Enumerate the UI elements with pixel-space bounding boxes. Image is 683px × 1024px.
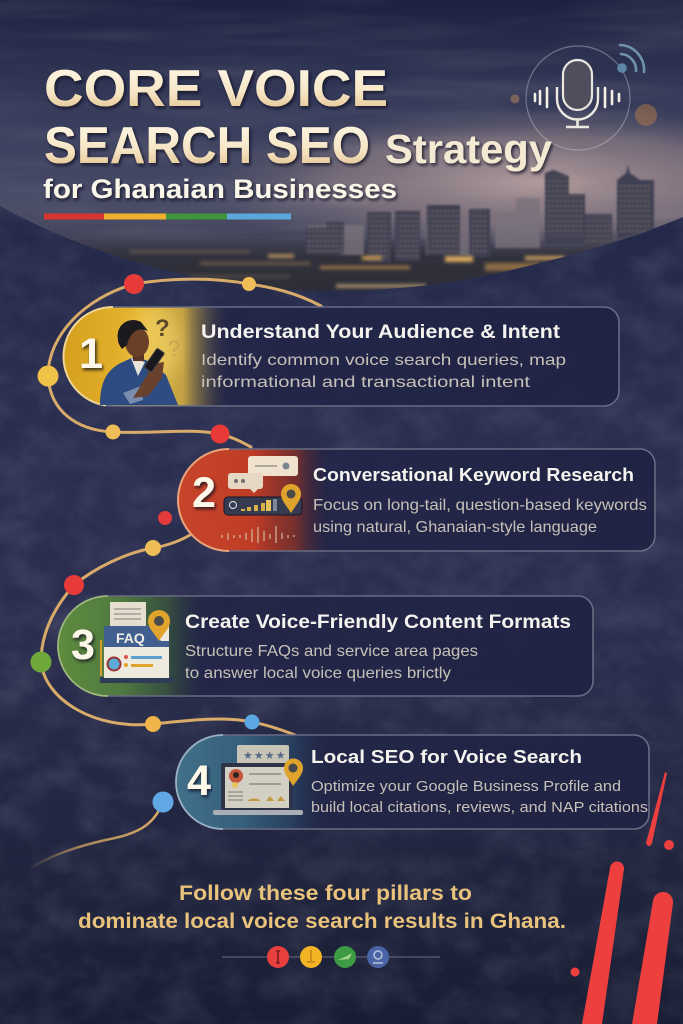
panel 1 description: Identify common voice search queries, map xyxy=(201,352,566,369)
microphone emblem xyxy=(510,45,657,150)
panel 4 heading: Local SEO for Voice Search xyxy=(311,747,582,767)
footer message xyxy=(78,882,566,933)
panel 1 description xyxy=(201,352,566,391)
panel 4 description xyxy=(311,778,648,816)
panel 2 description: using natural, Ghanaian-style language xyxy=(313,519,597,536)
icon: laptop with listing, stars and map pin xyxy=(213,745,303,815)
title xyxy=(43,60,552,204)
icon: chat bubbles, keyword bar and map pin xyxy=(222,456,302,543)
icon: FAQ document with map pin: FAQ xyxy=(116,630,145,646)
icon: person speaking into phone: ? xyxy=(168,336,180,361)
title: Strategy xyxy=(385,126,552,172)
number 3: 3 xyxy=(71,621,95,669)
header panorama: dusk sky and city skyline xyxy=(0,0,683,308)
decorative red streaks xyxy=(570,772,674,1024)
number 4: 4 xyxy=(187,757,211,805)
path nodes xyxy=(30,274,260,812)
panel 2 heading: Conversational Keyword Research xyxy=(313,465,634,485)
footer pillar icons xyxy=(222,946,440,968)
panel 3: create voice-friendly content formats xyxy=(58,596,593,696)
panel 1: understand your audience and intent xyxy=(64,307,619,406)
icon: person speaking into phone: ? xyxy=(155,315,170,342)
panel 3 description: Structure FAQs and service area pages xyxy=(185,643,478,660)
panel 1 description: informational and transactional intent xyxy=(201,374,531,391)
panel 2: conversational keyword research xyxy=(178,449,655,551)
panel 1 heading: Understand Your Audience & Intent xyxy=(201,322,561,343)
title colour stripe xyxy=(44,214,291,220)
panel 2 description: Focus on long-tail, question-based keywords xyxy=(313,497,647,514)
footer message: dominate local voice search results in Ghana. xyxy=(78,910,566,933)
number 2: 2 xyxy=(192,469,216,517)
panel 4 description: Optimize your Google Business Profile and xyxy=(311,778,621,795)
skyline buildings xyxy=(306,165,654,262)
panel 3 description xyxy=(185,643,478,682)
title: for Ghanaian Businesses xyxy=(43,174,397,204)
footer message: Follow these four pillars to xyxy=(179,882,472,905)
title: SEARCH SEO xyxy=(44,117,370,175)
icon: laptop with listing, stars and map pin: ★★★★ xyxy=(243,750,286,762)
winding path connector xyxy=(28,279,321,870)
city lights xyxy=(130,250,565,288)
panel 3 description: to answer local voice queries brictly xyxy=(185,665,451,682)
panel 3 heading: Create Voice-Friendly Content Formats xyxy=(185,612,571,633)
icon: person speaking into phone xyxy=(100,315,180,405)
number 1: 1 xyxy=(79,330,103,378)
panel 4 description: build local citations, reviews, and NAP citations xyxy=(311,799,648,816)
icon: FAQ document with map pin xyxy=(100,602,174,683)
title: CORE VOICE xyxy=(44,60,388,118)
panel 4: local SEO for voice search xyxy=(176,735,649,829)
panel 2 description xyxy=(313,497,647,536)
